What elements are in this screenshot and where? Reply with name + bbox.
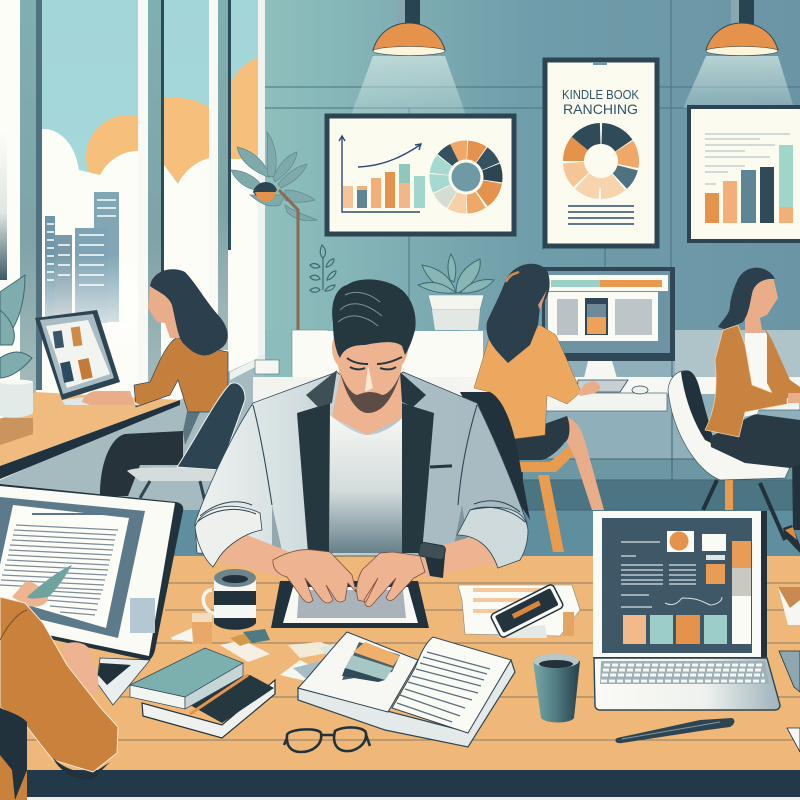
- donut chart: [574, 134, 628, 188]
- chair legs: [703, 480, 785, 540]
- smartphone: [490, 584, 564, 638]
- poster: bar chart right: [689, 107, 800, 241]
- small wall plant: [310, 245, 336, 292]
- jacket: [195, 372, 527, 556]
- beard: [340, 372, 401, 413]
- left cuff: [195, 502, 262, 567]
- mouth beard: [355, 393, 383, 403]
- dark gap below arm: [272, 505, 470, 555]
- chair back: [177, 383, 245, 470]
- front laptop left: [0, 484, 183, 705]
- white blouse: [743, 333, 767, 417]
- right laptop: [593, 511, 780, 710]
- woman on right: [668, 268, 800, 553]
- hand on laptop: [62, 642, 99, 695]
- poster: growth chart and donut: [327, 116, 514, 234]
- skirt: [505, 416, 569, 460]
- ceiling lamp left: [350, 0, 467, 118]
- lower torso: [0, 707, 27, 800]
- chair shell: [668, 371, 790, 480]
- wall: [262, 0, 800, 480]
- scattered papers and notes: [170, 585, 580, 682]
- eyes and brows: [347, 357, 402, 369]
- right forearm: [420, 535, 498, 578]
- keyboard and mouse: [577, 380, 648, 394]
- potted plant: [418, 254, 494, 330]
- photo on left page: [342, 642, 400, 680]
- ears and face: [332, 325, 408, 413]
- skyline: [42, 192, 138, 355]
- poster title: KINDLE BOOK: [562, 88, 640, 102]
- window plant and cup: [0, 275, 33, 418]
- back right desk: [460, 377, 800, 411]
- open book: [298, 632, 515, 747]
- ceiling lamp right: [683, 0, 794, 108]
- lapels: [297, 370, 452, 553]
- hand holding phone: [12, 581, 48, 607]
- floor lamp with plant: [231, 132, 328, 378]
- frames: [20, 0, 36, 400]
- poster title: [562, 88, 640, 117]
- watch: [418, 542, 446, 578]
- lower wall and floor right: [265, 330, 800, 560]
- hand: [578, 381, 600, 396]
- trousers: [100, 431, 183, 496]
- nose highlight: [365, 365, 373, 392]
- right edge desk items: [778, 587, 800, 752]
- chair seat: [127, 467, 222, 481]
- neck: [332, 373, 403, 435]
- left desk under window: [0, 392, 180, 479]
- base: [594, 658, 780, 710]
- t-shirt: [329, 415, 402, 553]
- floor and lower wall left: [0, 330, 300, 560]
- stacked books: [130, 648, 275, 738]
- right cuff: [457, 501, 528, 568]
- face and neck: [148, 283, 180, 338]
- keyboard: [600, 661, 769, 684]
- text lines on right page: [397, 652, 490, 722]
- laptop: [35, 310, 140, 405]
- white partitions: [253, 331, 483, 410]
- page text lines: [32, 513, 118, 515]
- poster title: RANCHING: [563, 101, 638, 117]
- monitor: [542, 267, 675, 378]
- sleeve folds: [253, 405, 477, 505]
- hands: [273, 550, 425, 607]
- leg: [566, 417, 604, 510]
- dark chair behind: [460, 392, 530, 520]
- hair: [332, 279, 416, 358]
- screen content: [621, 531, 751, 644]
- hair: [718, 268, 775, 330]
- stool: [508, 438, 584, 552]
- hair: [150, 269, 228, 355]
- glasses: [284, 727, 370, 752]
- foreground person in orange: [0, 565, 118, 800]
- windows with city view: [0, 0, 265, 400]
- bar chart: [339, 136, 425, 212]
- hair: [487, 264, 550, 363]
- woman at window: [35, 269, 245, 510]
- donut chart: [439, 150, 493, 204]
- sleeve: [0, 597, 118, 772]
- top and sleeve: [474, 325, 581, 440]
- top: [134, 337, 228, 412]
- woman at monitor: [474, 264, 604, 552]
- arm and hand: [82, 391, 135, 405]
- left forearm: [220, 535, 297, 578]
- jacket: [705, 325, 787, 437]
- poster: Kindle Book Ranching: [545, 60, 657, 246]
- pen: [615, 718, 734, 743]
- coffee cup: [533, 654, 580, 722]
- shoe and leg: [783, 455, 800, 553]
- man: [195, 279, 530, 578]
- tablet with hands: [271, 542, 446, 628]
- lid: [593, 511, 767, 658]
- trousers: [710, 414, 800, 468]
- sun and clouds: [42, 57, 258, 400]
- neck and face: [745, 276, 778, 336]
- leaves: [231, 132, 317, 221]
- front desk: [0, 556, 800, 800]
- striped mug: [203, 569, 256, 630]
